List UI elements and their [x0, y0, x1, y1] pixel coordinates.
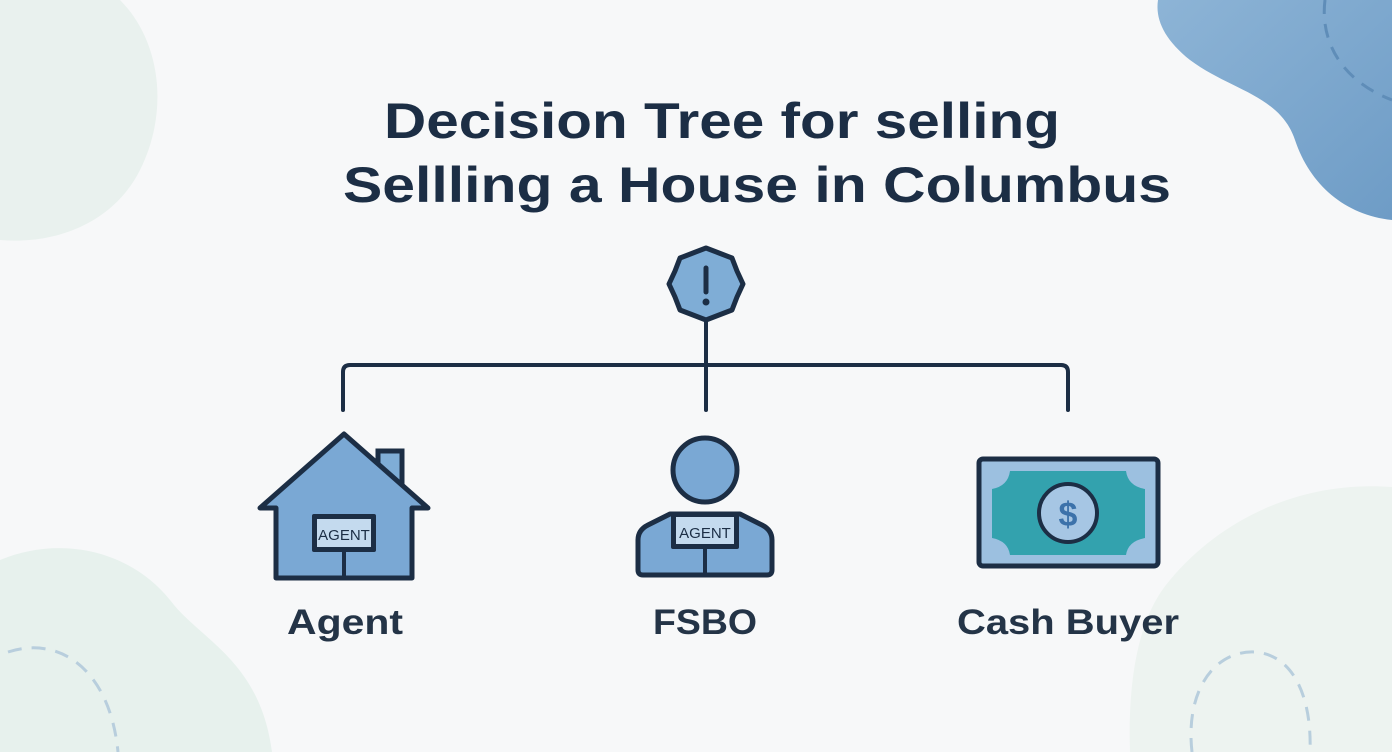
tree connector lines [343, 320, 1068, 410]
decorative blob top-left [0, 0, 157, 241]
icon: person with agent sign (FSBO): AGENT [679, 525, 731, 542]
decorative blob top-right [1157, 0, 1392, 220]
title: Decision Tree for selling [384, 93, 1060, 149]
title: Sellling a House in Columbus [343, 157, 1171, 213]
icon: decision badge [669, 248, 743, 320]
title [343, 93, 1171, 213]
icon: cash bill [979, 459, 1158, 566]
icon: person with agent sign (FSBO) [638, 438, 772, 575]
icon: house with agent sign: AGENT [318, 527, 370, 544]
label: FSBO: FSBO [653, 603, 757, 642]
decorative blob bottom-right [1130, 486, 1392, 752]
label: Cash Buyer: Cash Buyer [957, 603, 1179, 642]
decorative blob bottom-left [0, 548, 272, 752]
label: Agent: Agent [287, 603, 403, 642]
icon: cash bill: $ [1059, 496, 1078, 534]
icon: house with agent sign [260, 434, 428, 578]
